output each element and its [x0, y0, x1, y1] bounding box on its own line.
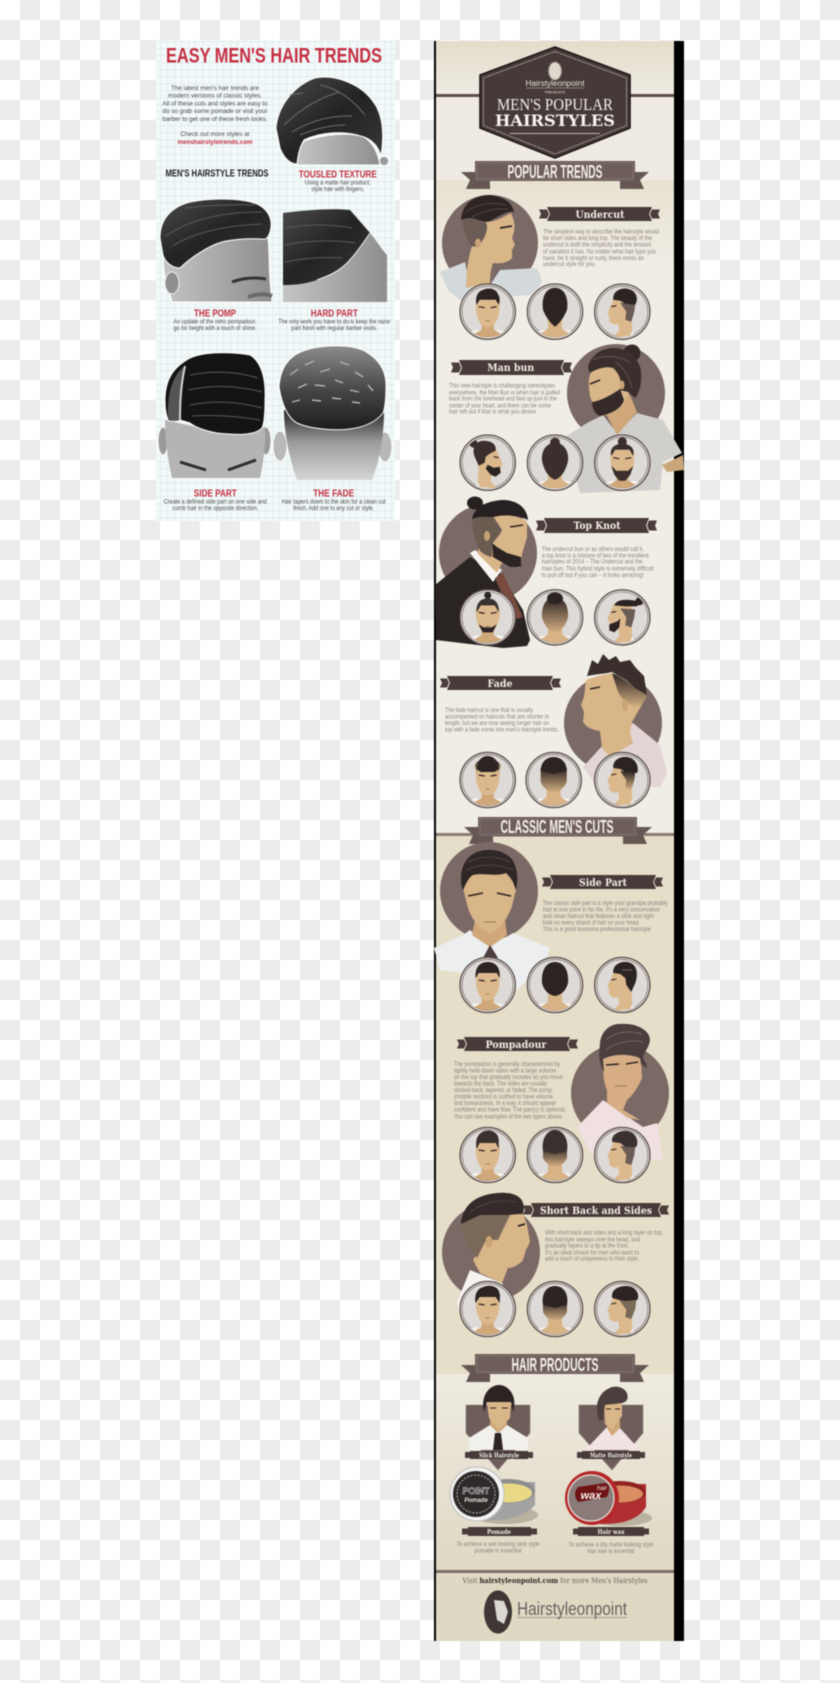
caption: side part: comb hair in the opposite direction. [172, 505, 258, 512]
caption: hard part: The only work you have to do is keep the razor [278, 318, 391, 325]
text: pomade: pomade is essential [474, 1548, 522, 1554]
ribbon: hair wax: Hair wax [598, 1528, 625, 1536]
text: top knot [542, 546, 654, 579]
intro text: The latest men's hair trends are [171, 85, 259, 92]
section ribbon: hair products [461, 1354, 649, 1382]
logo badge: Hairstyleonpoint [526, 79, 585, 88]
text: top knot: man bun. This hybrid style is extremely difficult [542, 565, 654, 572]
text: hair wax: To achieve a dry matte looking style [568, 1542, 654, 1548]
text: short back and sides: this hairstyle sweeps over the head, and [545, 1236, 640, 1243]
intro text: menshairstyletrends.com [178, 139, 253, 146]
caption: side part: SIDE PART [194, 488, 237, 500]
text: man bun: This new hairstyle is challenging stereotypes [449, 383, 555, 390]
caption: the pomp: THE POMP [194, 308, 236, 320]
text: side part: This is a good business professional hairstyle [543, 926, 651, 933]
panel: easy men's hair trends [156, 40, 395, 521]
caption: the pomp: go for height with a touch of shine. [174, 325, 257, 332]
illustration: fade man [564, 654, 667, 787]
caption: the fade [282, 488, 386, 512]
text: man bun: center of your head, and there can be some [449, 402, 551, 409]
intro text: Check out more styles at [180, 131, 250, 138]
text: fade: top with a fade come into men's hairstyle trends. [445, 726, 559, 733]
text: pompadour: (middle section) is crafted to have volume [454, 1094, 553, 1101]
product: hair wax tin: wax [581, 1490, 602, 1502]
text: undercut: be short sides and long top. The beauty of the [543, 235, 652, 242]
text: pompadour: You can see examples of the two types above. [454, 1113, 563, 1120]
panel: men's popular hairstyles background [434, 41, 684, 1641]
logo badge: MEN'S POPULAR [497, 95, 614, 114]
text: man bun: back from the forehead and tied up just in the [449, 396, 557, 403]
caption: the fade: finish. Add one to any cut or style. [293, 505, 374, 512]
ribbon: pomade [462, 1527, 537, 1536]
caption: hard part: part fresh with regular barber visits. [291, 325, 377, 332]
thumbnails: man bun [460, 435, 650, 493]
ribbon: man bun: Man bun [487, 362, 535, 374]
photo: the pomp [160, 199, 272, 302]
ribbon: top knot [536, 518, 657, 533]
text: hair wax [568, 1542, 654, 1555]
photo: tousled texture [276, 77, 388, 165]
badge: slick hairstyle [465, 1385, 533, 1470]
caption: hard part: HARD PART [311, 308, 358, 320]
text: undercut: of variation it has. No matter what hair type you [543, 248, 656, 255]
text: top knot: a top knot is a mixture of two of the trendiest [542, 552, 649, 559]
illustration: pompadour man [571, 1024, 669, 1163]
caption: tousled texture: Using a matte hair product, [305, 179, 371, 186]
intro text [162, 85, 268, 146]
photo: the fade [273, 346, 392, 480]
intro text: All of these cuts and styles are easy to [162, 100, 268, 108]
footer: logo: Hairstyleonpoint [517, 1599, 627, 1619]
caption: tousled texture: TOUSLED TEXTURE [299, 170, 377, 181]
ribbon: man bun [451, 360, 572, 375]
text: short back and sides: It's an ideal choice for men who want to [545, 1249, 639, 1256]
illustration: side part man [434, 842, 550, 990]
photo: side part [158, 353, 271, 478]
section ribbon: popular trends: POPULAR TRENDS [508, 161, 602, 182]
text: undercut [543, 228, 659, 268]
text: pompadour: slicked-back, tapered, or faded. The pomp [454, 1087, 552, 1094]
ribbon: side part [542, 875, 663, 889]
ribbon: fade: Fade [488, 678, 513, 690]
ribbon: pomade: Pomade [487, 1528, 511, 1536]
text: short back and sides: With short back and sides and a long layer on top, [545, 1230, 663, 1237]
thumbnails: undercut [460, 284, 650, 342]
ribbon: undercut: Undercut [576, 209, 625, 221]
caption: side part: Create a defined side part on one side and [164, 498, 267, 505]
text: fade: length, but we are now seeing longer hair on [445, 720, 549, 727]
text: side part: hold on every strand of hair on your head. [543, 920, 640, 927]
text: short back and sides: gradually tapers to a tip at the front. [545, 1243, 629, 1250]
text: pompadour: tightly held-down sides with a large volume [454, 1068, 556, 1075]
text: pomade [456, 1542, 540, 1554]
text: side part: had at one point in his life. It's a very conservative [543, 907, 660, 914]
intro text: modern versions of classic styles. [168, 93, 262, 100]
text: fade [445, 707, 559, 733]
ribbon: side part: Side Part [579, 877, 627, 889]
thumbnails: top knot [460, 590, 650, 647]
product: pomade tin: Pomade [464, 1498, 488, 1504]
intro text: do so grab some pomade or visit your [162, 108, 268, 115]
footer: visit line: Visit hairstyleonpoint.com for more Men's Hairstyles [462, 1576, 648, 1585]
logo badge: PRESENTS [545, 90, 566, 94]
text: side part [543, 900, 668, 933]
icon: logo head [548, 62, 562, 80]
ribbon: short back and sides: Short Back and Sides [540, 1205, 652, 1217]
text: top knot: hairstyles of 2014 – The Undercut and the [542, 559, 643, 566]
title: EASY MEN'S HAIR TRENDS [166, 45, 382, 68]
text: pomade: To achieve a wet looking slick style [456, 1542, 540, 1548]
caption: hard part [278, 308, 391, 332]
text: side part: and clean haircut that features a slick and tight [543, 913, 654, 920]
illustration: short back and sides man [442, 1193, 540, 1320]
text: undercut: undercut is both the simplicity and the amount [543, 242, 651, 249]
product: pomade tin [450, 1467, 538, 1524]
section ribbon: classic men's cuts: CLASSIC MEN'S CUTS [500, 816, 614, 837]
logo badge: HAIRSTYLES [495, 111, 615, 130]
footer: logo [484, 1590, 627, 1634]
illustration: top knot man [435, 496, 537, 648]
photo: hard part [283, 209, 387, 302]
text: side part: The classic side part is a style your grandpa probably [543, 900, 668, 907]
section ribbon: classic men's cuts [464, 816, 652, 844]
text: short back and sides [545, 1230, 663, 1263]
badge: matte hairstyle [577, 1387, 645, 1470]
caption: tousled texture: style hair with fingers. [311, 186, 364, 193]
section ribbon: popular trends [461, 161, 649, 189]
ribbon: undercut [539, 207, 660, 221]
intro text: barber to get one of these fresh looks. [162, 116, 268, 123]
product: hair wax tin: hair [597, 1486, 608, 1492]
text: pompadour: towards the back. The sides are usually [454, 1081, 548, 1088]
caption: the pomp: An update of the retro pompadour, [174, 318, 257, 325]
caption: the pomp [174, 308, 257, 332]
text: undercut: have, be it straight or curly, there exists an [543, 255, 644, 262]
thumbnails: fade [460, 752, 650, 810]
caption: tousled texture [299, 170, 377, 193]
section ribbon: hair products: HAIR PRODUCTS [512, 1354, 598, 1375]
ribbon: pompadour: Pompadour [486, 1039, 547, 1051]
caption: the fade: THE FADE [313, 488, 354, 500]
text: man bun [449, 383, 560, 416]
text: fade: The fade haircut is one that is usually [445, 707, 534, 714]
text: short back and sides: add a touch of uniqueness to their style. [545, 1256, 639, 1263]
text: pompadour: The pompadour is generally characterized by [454, 1061, 561, 1068]
text: pompadour: and forwardness. In a way, it should appear [454, 1100, 556, 1107]
product: hair wax tin [565, 1471, 652, 1526]
text: pompadour [454, 1061, 566, 1120]
text: undercut: The simplest way to describe the hairstyle would [543, 228, 659, 235]
logo badge [480, 47, 630, 158]
text: top knot: to pull off but if you can – it looks amazing! [542, 572, 644, 579]
product: pomade tin: POINT [462, 1486, 490, 1496]
ribbon: pompadour [457, 1037, 578, 1051]
ribbon: matte hairstyle label: Matte Hairstyle [590, 1452, 632, 1460]
text: man bun: everywhere, the Man Bun is when hair is pulled [449, 389, 560, 396]
ribbon: slick hairstyle label: Slick Hairstyle [479, 1452, 519, 1460]
illustration: undercut man [440, 195, 542, 300]
ribbon: hair wax [573, 1527, 649, 1536]
text: undercut: undercut style for you. [543, 261, 596, 268]
icon: logo head [484, 1590, 512, 1634]
text: hair wax: hair wax is essential [588, 1549, 634, 1555]
thumbnails: side part [460, 957, 650, 1015]
ribbon: top knot: Top Knot [574, 520, 621, 532]
text: fade: accompanied on haircuts that are shorter in [445, 713, 549, 720]
text: top knot: The undercut bun or as others would call it, [542, 546, 644, 553]
thumbnails: pompadour [460, 1127, 650, 1185]
text: man bun: hair left out if that is what you desire [449, 409, 536, 416]
caption: side part [164, 488, 267, 512]
brand label: MEN'S HAIRSTYLE TRENDS [166, 168, 268, 180]
text: pompadour: on the top that gradually recedes as you move [454, 1074, 563, 1081]
thumbnails: short back and sides [460, 1281, 650, 1339]
ribbon: fade [440, 676, 561, 690]
illustration: man bun man [565, 344, 684, 493]
caption: the fade: Hair tapers down to the skin for a clean cut [282, 498, 386, 505]
text: pompadour: confident and have flow. The part(s) is optional. [454, 1107, 566, 1114]
